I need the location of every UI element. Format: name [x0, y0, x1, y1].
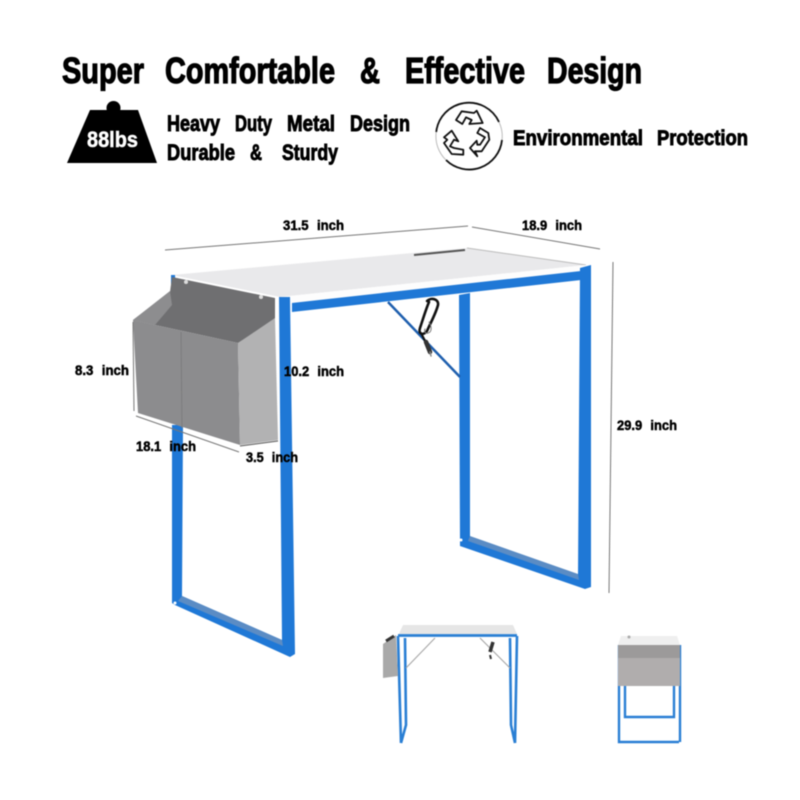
text block: heavy duty: Durable — [167, 140, 235, 165]
dimension labels: 8.3 inch — [75, 362, 129, 378]
text block: heavy duty: Metal — [287, 111, 335, 136]
dimension labels: 18.1 inch — [136, 438, 196, 454]
icon: 88lbs weight — [67, 101, 157, 163]
text block: heavy duty: Sturdy — [282, 140, 339, 165]
power cord — [420, 299, 438, 356]
main desk illustration — [133, 248, 591, 657]
dimension labels: 10.2 inch — [284, 363, 344, 379]
dimension labels: 31.5 inch — [283, 217, 344, 233]
text block: heavy duty: Design — [350, 111, 410, 136]
text block: heavy duty: Heavy — [167, 111, 221, 136]
text block: heavy duty — [167, 111, 410, 165]
desk frame — [171, 265, 591, 657]
text block: heavy duty: Duty — [235, 111, 273, 136]
text block: heavy duty: & — [250, 140, 262, 165]
dimension labels: 29.9 inch — [617, 417, 677, 433]
desk top — [172, 248, 587, 303]
dimension lines — [133, 226, 613, 593]
dimension labels: 3.5 inch — [246, 449, 298, 465]
thumbnail: desk side view — [618, 636, 680, 742]
text: environmental protection — [513, 127, 748, 150]
title: Design — [547, 50, 642, 91]
icon: 88lbs weight: 88lbs — [87, 127, 138, 152]
title — [62, 50, 642, 91]
title: & — [360, 50, 380, 91]
dimension labels — [75, 217, 677, 465]
text: environmental protection: Protection — [657, 127, 748, 150]
text: environmental protection: Environmental — [513, 127, 643, 150]
storage pocket — [133, 277, 278, 446]
title: Comfortable — [165, 50, 335, 91]
dimension labels: 18.9 inch — [522, 217, 582, 233]
title: Super — [62, 50, 144, 91]
icon: recycle — [436, 103, 502, 170]
thumbnail: desk front view — [383, 625, 517, 743]
title: Effective — [405, 50, 525, 91]
